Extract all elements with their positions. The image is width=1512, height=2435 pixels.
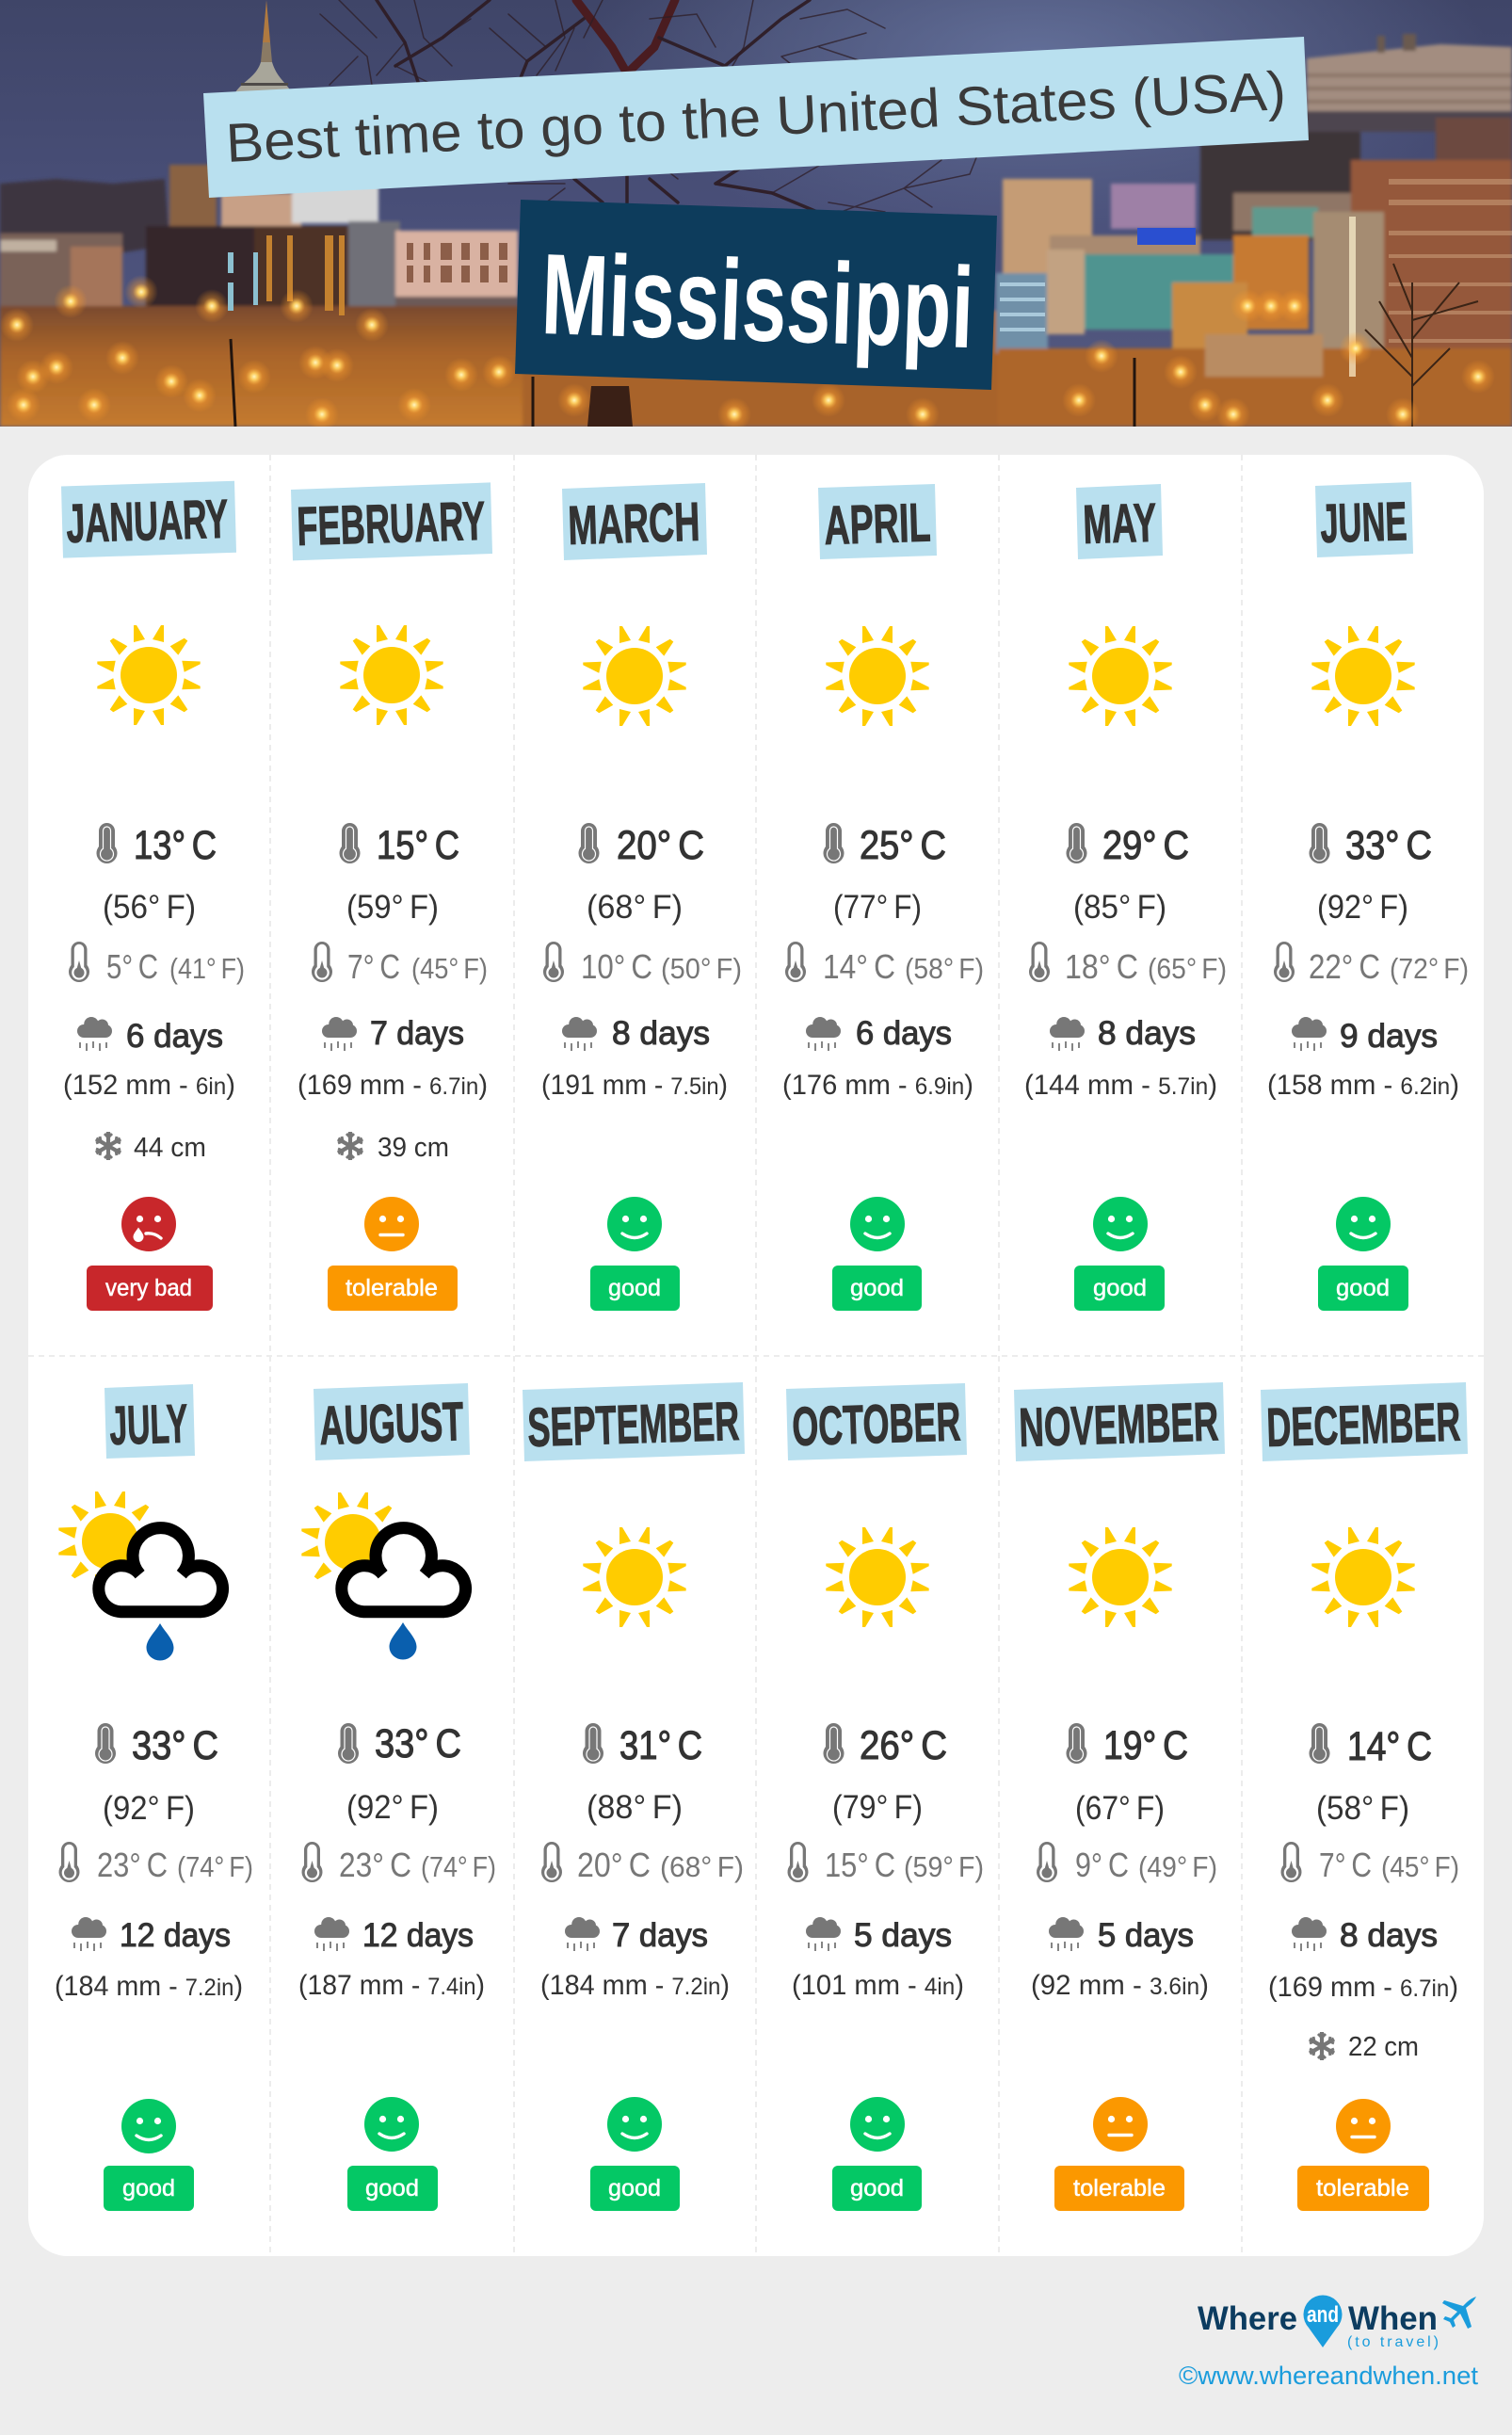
month heading: March: MARCH: [567, 492, 700, 556]
panel: May: [1024, 484, 1227, 1311]
icon: sun: [1311, 626, 1415, 726]
logo: Where and When: Where: [1198, 2300, 1297, 2337]
high temperature: 20° C: [617, 823, 704, 868]
rating badge: good: [1074, 1266, 1165, 1311]
low temperature: 23° C: [97, 1846, 168, 1884]
month heading: February: FEBRUARY: [296, 491, 486, 557]
low temperature: [301, 1842, 496, 1884]
hero: city skyline at night: [0, 0, 1512, 431]
high temperature fahrenheit: (92° F): [1317, 889, 1408, 926]
month heading: March: [562, 483, 707, 560]
rating badge: tolerable: tolerable: [1073, 2175, 1166, 2201]
low temperature: 7° C: [1319, 1846, 1372, 1884]
rating badge: very bad: very bad: [105, 1275, 192, 1301]
month heading: September: SEPTEMBER: [526, 1391, 740, 1459]
icon: good face: [850, 1197, 905, 1251]
tree trunk: [587, 386, 633, 427]
rating badge: very bad: [87, 1266, 213, 1311]
tree branches: [320, 0, 979, 217]
rainy days: 7 days: [612, 1917, 708, 1954]
month heading: November: [1014, 1382, 1225, 1461]
icon: tolerable face: [1093, 2097, 1148, 2152]
high temperature: [339, 823, 459, 868]
logo: Where and When: When: [1348, 2300, 1438, 2337]
low temperature: 23° C: [339, 1846, 411, 1884]
rating badge: good: [347, 2166, 438, 2211]
rainy days: [1049, 1917, 1194, 1954]
low temperature: [541, 1842, 744, 1884]
rainfall amount: (191 mm - 7.5in): [541, 1070, 728, 1101]
icon: sun: [1069, 626, 1172, 726]
rainy days: 8 days: [1098, 1015, 1196, 1052]
high temperature fahrenheit: (67° F): [1075, 1790, 1165, 1827]
rainfall amount: (184 mm - 7.2in): [540, 1970, 730, 2001]
month heading: October: OCTOBER: [791, 1391, 961, 1458]
low temperature: 10° C: [581, 947, 652, 986]
high temperature: 33° C: [375, 1721, 461, 1766]
snowfall: 22 cm: [1348, 2032, 1419, 2062]
high temperature fahrenheit: (59° F): [346, 889, 439, 926]
snowfall: [96, 1132, 206, 1163]
rainy days: 9 days: [1340, 1018, 1438, 1055]
low temperature: 18° C: [1065, 947, 1138, 986]
month heading: August: AUGUST: [318, 1391, 464, 1457]
low temperature: (65° F): [1148, 952, 1227, 985]
rating badge: good: good: [850, 2175, 904, 2201]
high temperature: [1066, 823, 1189, 868]
snowfall: 44 cm: [134, 1133, 206, 1163]
high temperature: [583, 1723, 702, 1768]
low temperature: [1280, 1842, 1459, 1884]
subtitle banner: [203, 37, 1309, 198]
high temperature: [823, 823, 946, 868]
low temperature: 15° C: [825, 1846, 895, 1884]
rainy days: [562, 1015, 710, 1052]
rainy days: [314, 1917, 474, 1954]
low temperature: [1037, 1842, 1217, 1884]
rainy days: [806, 1917, 952, 1954]
high temperature: 13° C: [134, 823, 217, 868]
panel: February: [291, 482, 492, 1311]
rainfall amount: (158 mm - 6.2in): [1267, 1070, 1459, 1101]
logo: Where and When: [1198, 2296, 1476, 2350]
month heading: June: [1315, 482, 1413, 557]
rainy days: [806, 1015, 952, 1052]
rating badge: tolerable: tolerable: [1316, 2175, 1409, 2201]
icon: sun behind rain cloud: [301, 1492, 466, 1659]
rainy days: 8 days: [1340, 1917, 1438, 1954]
rainy days: 12 days: [362, 1917, 474, 1954]
rainy days: 5 days: [1098, 1917, 1194, 1954]
high temperature: 25° C: [860, 823, 946, 868]
rating badge: tolerable: tolerable: [346, 1275, 438, 1301]
low temperature: [58, 1842, 253, 1884]
high temperature fahrenheit: (92° F): [346, 1789, 439, 1826]
low temperature: 20° C: [577, 1846, 651, 1884]
icon: sun: [1311, 1527, 1415, 1627]
subtitle banner: Best time to go to the United States (USA): [224, 60, 1287, 174]
low temperature: (74° F): [177, 1850, 253, 1883]
rating badge: good: [832, 1266, 922, 1311]
rating badge: good: [1318, 1266, 1408, 1311]
panel: June: [1267, 482, 1469, 1311]
brick building lit windows: [266, 235, 345, 315]
rainy days: 6 days: [856, 1015, 952, 1052]
panel: November: [1014, 1382, 1225, 2211]
rating badge: good: good: [122, 2175, 175, 2201]
low temperature: 5° C: [106, 947, 158, 986]
rainfall amount: (144 mm - 5.7in): [1024, 1070, 1217, 1101]
low temperature: [543, 942, 742, 986]
panel: July: [55, 1384, 253, 2211]
rainy days: 5 days: [854, 1917, 952, 1954]
high temperature: [1309, 1723, 1432, 1769]
rainfall amount: (184 mm - 7.2in): [55, 1971, 243, 2002]
low temperature: [785, 942, 984, 986]
rainy days: [72, 1917, 231, 1954]
icon: sun: [826, 1527, 929, 1627]
icon: sun: [826, 626, 929, 726]
high temperature: 14° C: [1347, 1724, 1432, 1769]
rating badge: good: [590, 1266, 680, 1311]
panel: April: [782, 484, 984, 1311]
rainfall amount: (176 mm - 6.9in): [782, 1070, 973, 1101]
high temperature: 15° C: [377, 823, 459, 868]
low temperature: (50° F): [661, 952, 742, 985]
rainy days: 6 days: [126, 1018, 223, 1055]
low temperature: (59° F): [904, 1850, 984, 1883]
month heading: June: JUNE: [1319, 491, 1407, 555]
high temperature: [96, 823, 217, 868]
high temperature fahrenheit: (88° F): [587, 1789, 683, 1826]
rainfall amount: (169 mm - 6.7in): [298, 1070, 488, 1101]
rainfall amount: (101 mm - 4in): [792, 1970, 964, 2001]
panel: March: [541, 483, 742, 1311]
icon: good face: [607, 1197, 662, 1251]
high temperature: 19° C: [1103, 1723, 1188, 1768]
icon: good face: [850, 2097, 905, 2152]
high temperature fahrenheit: (58° F): [1316, 1790, 1409, 1827]
panel: January: [61, 481, 245, 1311]
rainy days: [1292, 1917, 1438, 1954]
high temperature: 29° C: [1102, 823, 1189, 868]
icon: good face: [1336, 1197, 1391, 1251]
snowfall: [338, 1132, 449, 1163]
rating badge: good: good: [1093, 1275, 1147, 1301]
high temperature fahrenheit: (68° F): [587, 889, 683, 926]
low temperature: 7° C: [347, 947, 400, 986]
month heading: January: [61, 481, 236, 558]
high temperature fahrenheit: (77° F): [833, 889, 922, 926]
high temperature: 33° C: [132, 1723, 218, 1768]
rating badge: good: good: [608, 1275, 661, 1301]
month heading: February: [291, 482, 492, 560]
city lights: [0, 275, 1495, 431]
panel: September: [523, 1382, 745, 2211]
icon: good face: [364, 2097, 419, 2152]
title banner: Mississippi: [515, 200, 997, 390]
icon: very bad face: [121, 1197, 176, 1251]
month heading: July: JULY: [108, 1393, 188, 1457]
high temperature: 26° C: [860, 1723, 947, 1768]
rainy days: 12 days: [120, 1917, 231, 1954]
month heading: September: [523, 1382, 745, 1461]
low temperature: [1029, 942, 1227, 986]
high temperature: [1066, 1723, 1188, 1768]
rating badge: tolerable: [328, 1266, 458, 1311]
high temperature: [95, 1723, 218, 1768]
low temperature: (74° F): [421, 1850, 496, 1883]
icon: good face: [121, 2099, 176, 2153]
website credit: ©www.whereandwhen.net: [1179, 2362, 1478, 2390]
lamp posts: [231, 339, 1134, 427]
icon: sun: [583, 626, 686, 726]
high temperature: [578, 823, 704, 868]
icon: map pin: [1304, 2296, 1343, 2347]
right bare tree: [1365, 264, 1478, 427]
low temperature: (49° F): [1138, 1850, 1217, 1883]
icon: sun: [583, 1527, 686, 1627]
high temperature fahrenheit: (79° F): [832, 1789, 923, 1826]
low temperature: (72° F): [1390, 952, 1469, 985]
rating badge: good: [832, 2166, 922, 2211]
month heading: July: [105, 1384, 195, 1459]
rainy days: [1050, 1015, 1196, 1052]
low temperature: (45° F): [1381, 1850, 1459, 1883]
panel: October: [786, 1383, 984, 2211]
rainy days: [1292, 1017, 1438, 1055]
high temperature fahrenheit: (85° F): [1073, 889, 1166, 926]
low temperature: [312, 942, 488, 986]
month heading: November: NOVEMBER: [1018, 1391, 1219, 1459]
rating badge: good: good: [850, 1275, 904, 1301]
rainy days: 7 days: [370, 1015, 464, 1052]
icon: tolerable face: [364, 1197, 419, 1251]
rainy days: 8 days: [612, 1015, 710, 1052]
low temperature: 22° C: [1309, 947, 1380, 986]
right building stripes: [1389, 179, 1512, 343]
rainy days: [565, 1917, 708, 1954]
low temperature: 9° C: [1075, 1846, 1129, 1884]
logo: Where and When: (to travel): [1347, 2334, 1439, 2350]
high temperature: 31° C: [619, 1723, 702, 1768]
rainfall amount: (169 mm - 6.7in): [1268, 1972, 1458, 2003]
rainfall amount: (152 mm - 6in): [63, 1070, 235, 1101]
title banner: Mississippi: Mississippi: [539, 230, 975, 372]
high temperature fahrenheit: (56° F): [103, 889, 196, 926]
snowfall: [1310, 2032, 1419, 2062]
panel: months card: [28, 455, 1484, 2256]
snowfall: 39 cm: [378, 1133, 449, 1163]
month heading: August: [314, 1383, 470, 1460]
high temperature: [823, 1723, 947, 1768]
rating badge: good: good: [365, 2175, 419, 2201]
month heading: April: APRIL: [823, 492, 931, 556]
icon: map pin: and: [1307, 2302, 1339, 2328]
panel: August: [298, 1383, 496, 2211]
month heading: January: JANUARY: [65, 489, 229, 555]
low temperature: 14° C: [823, 947, 895, 986]
panel: December: [1261, 1382, 1468, 2211]
icon: sun: [97, 625, 201, 725]
high temperature: [338, 1721, 461, 1766]
month heading: October: [786, 1383, 967, 1460]
icon: sun: [1069, 1527, 1172, 1627]
icon: good face: [607, 2097, 662, 2152]
icon: sun behind rain cloud: [58, 1492, 223, 1661]
high temperature: 33° C: [1345, 823, 1432, 868]
high temperature: [1309, 823, 1432, 868]
low temperature: [1274, 942, 1469, 986]
rainy days: [322, 1015, 464, 1052]
rainy days: [77, 1017, 223, 1055]
low temperature: (68° F): [660, 1850, 744, 1883]
month heading: May: MAY: [1082, 492, 1157, 556]
rating badge: good: good: [1336, 1275, 1390, 1301]
rating badge: good: good: [608, 2175, 661, 2201]
icon: tolerable face: [1336, 2099, 1391, 2153]
month heading: April: [818, 484, 937, 559]
low temperature: [787, 1842, 984, 1884]
rainfall amount: (187 mm - 7.4in): [298, 1970, 485, 2001]
pale building windows: [407, 243, 507, 282]
rating badge: tolerable: [1297, 2166, 1429, 2211]
rainfall amount: (92 mm - 3.6in): [1031, 1970, 1209, 2001]
icon: sun: [340, 625, 443, 725]
icon: plane: [1442, 2297, 1476, 2329]
rating badge: good: [104, 2166, 194, 2211]
month heading: May: [1076, 484, 1163, 559]
low temperature: (45° F): [411, 952, 488, 985]
icon: good face: [1093, 1197, 1148, 1251]
spire: [235, 0, 292, 92]
rating badge: good: [590, 2166, 680, 2211]
low temperature: [69, 942, 245, 986]
low temperature: (58° F): [905, 952, 984, 985]
high temperature fahrenheit: (92° F): [103, 1790, 195, 1827]
rating badge: tolerable: [1054, 2166, 1184, 2211]
low temperature: (41° F): [169, 952, 245, 985]
